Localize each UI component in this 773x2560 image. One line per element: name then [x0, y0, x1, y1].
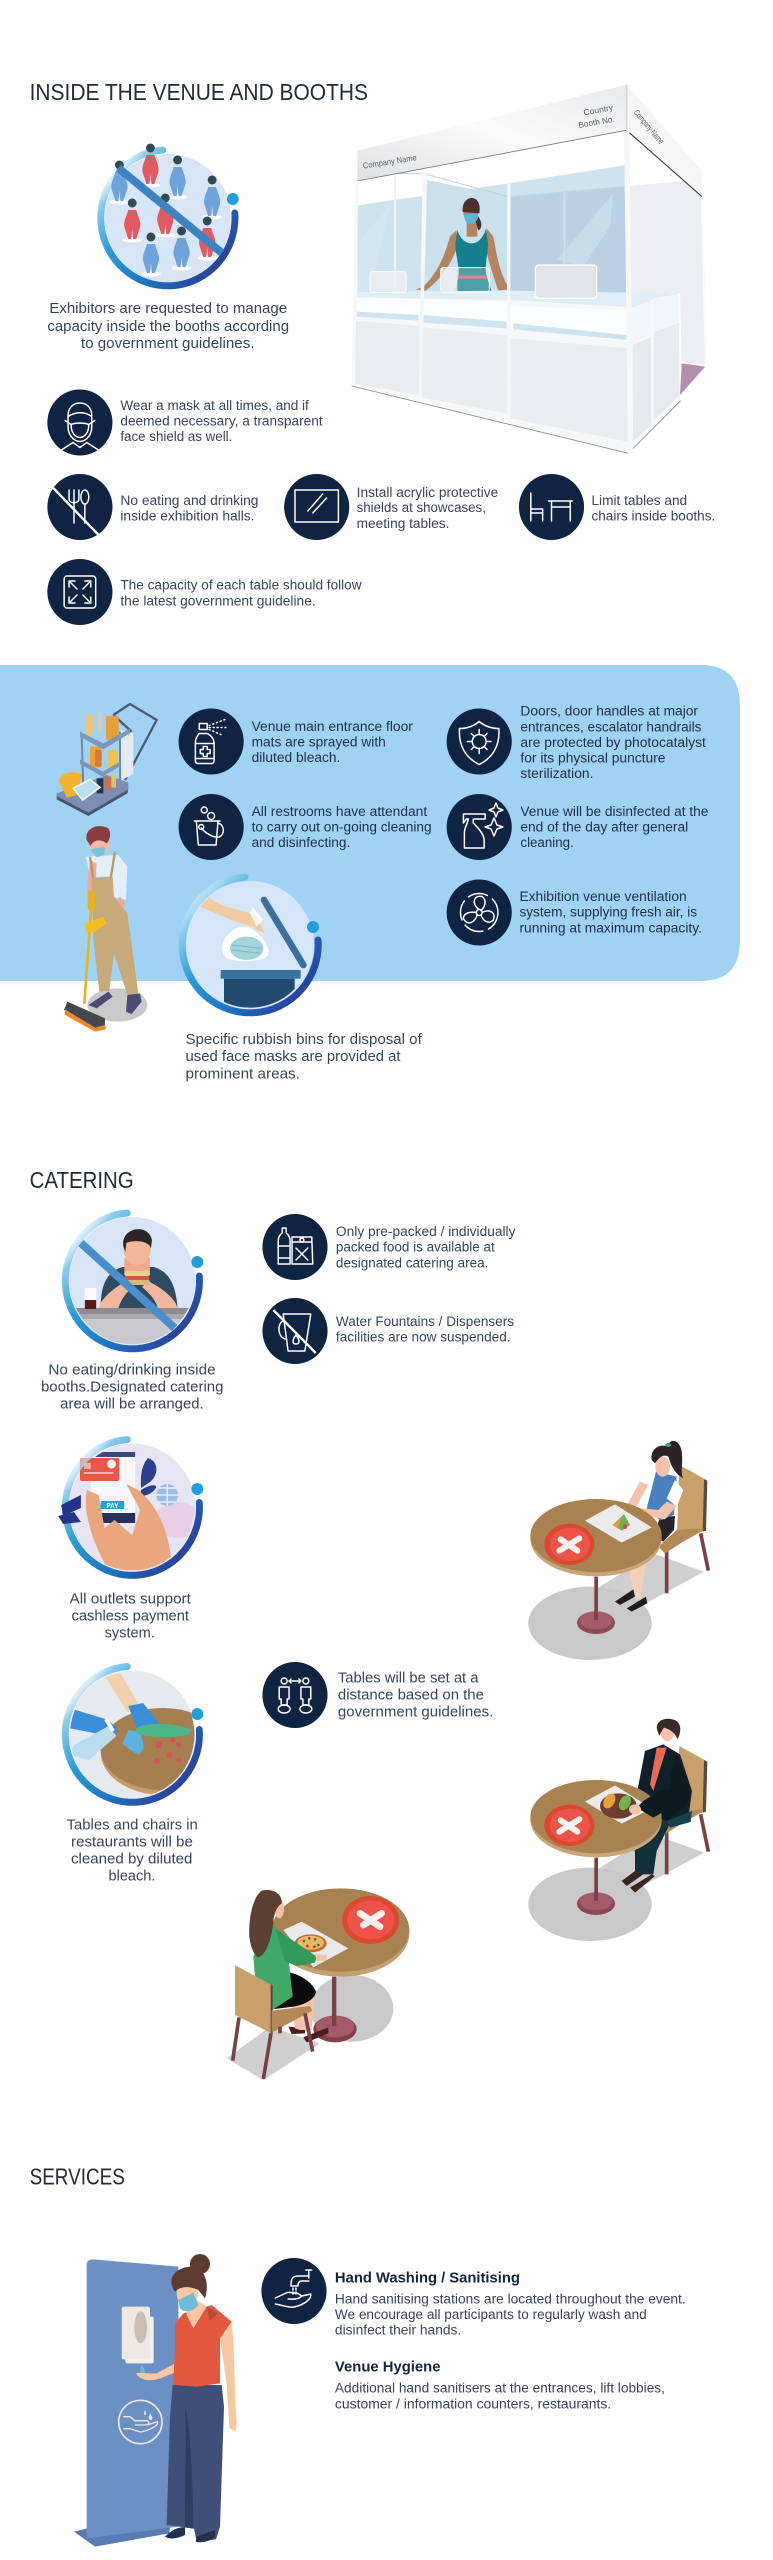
- text: rubbish bins: prominent areas.: [185, 1066, 300, 1082]
- staff woman with mask: [416, 198, 509, 292]
- icon: table distance: [262, 1662, 328, 1728]
- illustration: seated woman in green at table: [227, 1888, 409, 2080]
- illustration: seated woman in blue at table: [528, 1441, 708, 1660]
- text: cashless caption: All outlets support: [70, 1592, 192, 1608]
- text: hand washing: Hand sanitising stations are located throughout the event.: [335, 2290, 686, 2306]
- heading: inside the venue and booths: INSIDE THE VENUE AND BOOTHS: [30, 79, 368, 105]
- sign icon: [119, 2400, 162, 2444]
- text: wear a mask: face shield as well.: [120, 428, 232, 444]
- icon: hand washing: [261, 2258, 327, 2324]
- text: door handles: [520, 703, 706, 781]
- showcase counter: [352, 291, 681, 453]
- text: packed food: Only pre-packed / individually: [336, 1223, 516, 1239]
- icon: no water fountains: [262, 1298, 328, 1364]
- illustration: seated man at table: [528, 1719, 708, 1941]
- illustration: cashless payment: PAY: [107, 1503, 119, 1510]
- icon: ventilation fan: [447, 880, 512, 946]
- fascia: Company Name: [632, 108, 666, 146]
- illustration: table cleaning: [65, 1666, 225, 1802]
- text: floor mats: diluted bleach.: [252, 749, 340, 765]
- text: ventilation: [519, 888, 702, 935]
- text: water fountains: Water Fountains / Dispensers: [336, 1313, 514, 1329]
- text: venue hygiene: Venue Hygiene: [335, 2360, 441, 2376]
- text: no eating: No eating and drinking: [120, 492, 258, 508]
- text: rubbish bins: Specific rubbish bins for disposal of: [185, 1032, 423, 1048]
- text: table capacity: [120, 577, 363, 608]
- text: door handles: for its physical puncture: [520, 749, 666, 765]
- icon: packed food: [262, 1214, 328, 1280]
- text: door handles: are protected by photocatalyst: [520, 734, 706, 750]
- text: hand washing: We encourage all participants to regularly wash and: [335, 2306, 647, 2322]
- text: venue hygiene: Additional hand sanitisers at the entrances, lift lobbies,: [335, 2380, 665, 2396]
- text: manage capacity: capacity inside the booths according: [47, 319, 289, 335]
- dispenser: [122, 2307, 154, 2374]
- text: cleaned by bleach: [67, 1817, 198, 1885]
- bin, hand and mask bag: [200, 897, 303, 1009]
- text: ventilation: Exhibition venue ventilation: [519, 888, 687, 904]
- woman with mask: [136, 2254, 237, 2542]
- text: rubbish bins: used face masks are provided at: [185, 1049, 401, 1065]
- text: acrylic shields: shields at showcases,: [357, 499, 486, 515]
- text: packed food: packed food is available at: [336, 1239, 495, 1255]
- text: disinfected: Venue will be disinfected at the: [520, 803, 709, 819]
- icon: tables and chairs: [519, 474, 584, 540]
- text: acrylic shields: meeting tables.: [357, 515, 449, 531]
- icon: no eating: [47, 474, 112, 540]
- heading: services: SERVICES: [30, 2164, 125, 2190]
- text: door handles: sterilization.: [520, 765, 593, 781]
- text: venue hygiene: customer / information counters, restaurants.: [335, 2395, 611, 2411]
- text: cashless caption: system.: [105, 1626, 155, 1642]
- icon: face mask: [47, 390, 112, 456]
- text: acrylic shields: Install acrylic protective: [357, 484, 498, 500]
- text: door handles: entrances, escalator handrails: [520, 718, 702, 734]
- text: floor mats: [252, 718, 413, 765]
- text: cashless caption: [70, 1592, 192, 1642]
- text: hand washing: Hand Washing / Sanitising: [335, 2270, 520, 2286]
- text: no eating caption: [41, 1362, 223, 1413]
- right wall and carpet: [630, 179, 707, 395]
- illustration: hand sanitiser station: [74, 2254, 237, 2547]
- text: table capacity: The capacity of each table should follow: [120, 577, 363, 593]
- text: packed food: designated catering area.: [336, 1254, 488, 1270]
- text: cleaned by bleach: Tables and chairs in: [67, 1817, 198, 1833]
- text: door handles: Doors, door handles at major: [520, 703, 698, 719]
- text: no eating caption: area will be arranged.: [60, 1397, 204, 1413]
- heading: catering: CATERING: [30, 1167, 134, 1193]
- illustration: cleaning trolley: [57, 704, 157, 816]
- illustration: crowd capacity ring: [101, 144, 239, 286]
- text: water fountains: facilities are now suspended.: [336, 1329, 511, 1345]
- text: hand washing: [335, 2270, 686, 2337]
- fascia: Company Name: [362, 152, 418, 171]
- text: cleaned by bleach: bleach.: [109, 1869, 155, 1885]
- panel: cleaning band: [0, 665, 740, 981]
- text: restrooms: to carry out on-going cleaning: [252, 819, 432, 835]
- text: no eating: inside exhibition halls.: [120, 507, 255, 524]
- illustration: cashless payment: [58, 1440, 203, 1575]
- icon: spray bottle: [179, 708, 244, 774]
- frame poles: [353, 130, 653, 453]
- text: hand washing: disinfect their hands.: [335, 2321, 461, 2337]
- text: cleaned by bleach: cleaned by diluted: [71, 1852, 192, 1868]
- text: disinfected: end of the day after general: [520, 819, 688, 835]
- text: no eating caption: No eating/drinking inside: [48, 1362, 216, 1378]
- fascia: Country: [583, 102, 615, 117]
- icon: virus shield: [447, 708, 512, 774]
- text: ventilation: running at maximum capacity.: [519, 919, 702, 935]
- text: no eating: [120, 492, 258, 524]
- text: cashless caption: cashless payment: [72, 1609, 190, 1625]
- fascia: [357, 85, 702, 197]
- text: acrylic shields: [357, 484, 498, 531]
- text: restrooms: and disinfecting.: [252, 834, 350, 850]
- text: restrooms: [252, 803, 432, 850]
- text: no eating caption: booths.Designated catering: [41, 1380, 223, 1396]
- text: distance: distance based on the: [338, 1687, 484, 1703]
- text: ventilation: system, supplying fresh air, is: [519, 904, 697, 920]
- text: water fountains: [336, 1313, 514, 1345]
- icon: bucket: [179, 794, 244, 860]
- text: restrooms: All restrooms have attendant: [252, 803, 427, 819]
- illustration: rubbish bin ring: [182, 877, 319, 1013]
- text: manage capacity: [47, 301, 289, 352]
- banner stand: [74, 2259, 178, 2547]
- back walls: [357, 130, 627, 295]
- text: disinfected: [520, 803, 709, 850]
- text: venue hygiene: [335, 2360, 665, 2411]
- text: cleaned by bleach: restaurants will be: [71, 1834, 193, 1850]
- text: table capacity: the latest government guideline.: [120, 592, 316, 608]
- text: distance: Tables will be set at a: [338, 1670, 479, 1686]
- acrylic shields: [370, 265, 597, 298]
- text: wear a mask: deemed necessary, a transparent: [120, 413, 323, 429]
- text: packed food: [336, 1223, 516, 1270]
- text: manage capacity: Exhibitors are requested to manage: [49, 301, 287, 317]
- icon: disinfectant spray: [447, 794, 512, 860]
- text: wear a mask: Wear a mask at all times, and if: [120, 397, 309, 413]
- illustration: cleaner with mop: [64, 826, 147, 1032]
- text: rubbish bins: [185, 1032, 423, 1082]
- text: floor mats: mats are sprayed with: [252, 734, 386, 750]
- icon: acrylic shield: [284, 474, 349, 540]
- text: limit tables: [591, 492, 715, 524]
- text: limit tables: Limit tables and: [591, 492, 687, 508]
- fascia: Booth No.: [578, 114, 615, 130]
- text: distance: [338, 1670, 493, 1721]
- text: limit tables: chairs inside booths.: [591, 507, 715, 524]
- text: disinfected: cleaning.: [520, 834, 574, 850]
- illustration: no eating inside booths: [59, 1213, 207, 1349]
- text: floor mats: Venue main entrance floor: [252, 718, 413, 734]
- text: distance: government guidelines.: [338, 1705, 493, 1721]
- text: wear a mask: [120, 397, 323, 444]
- text: manage capacity: to government guidelines.: [81, 336, 255, 352]
- icon: capacity arrows: [47, 559, 112, 625]
- illustration: exhibition booth: [352, 85, 707, 453]
